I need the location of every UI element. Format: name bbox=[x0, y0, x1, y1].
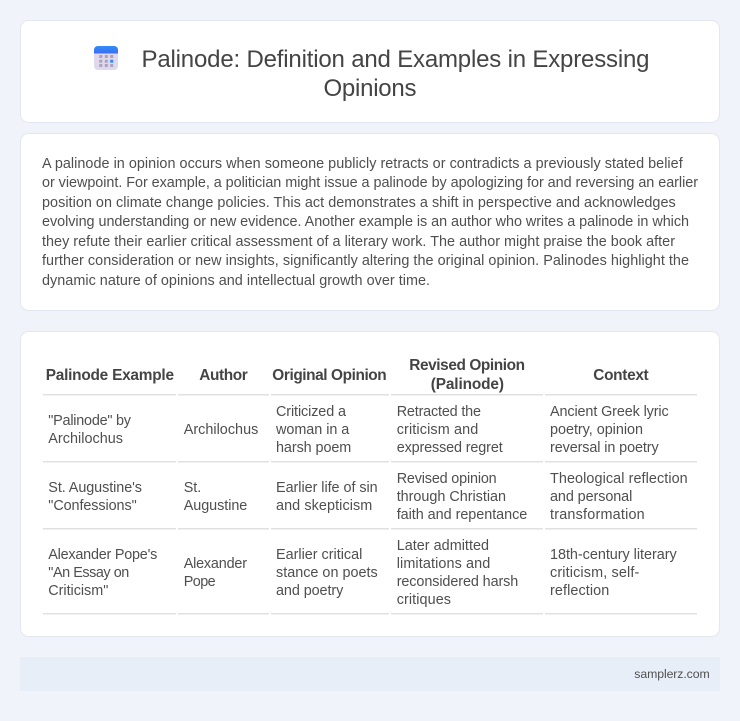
footer: samplerz.com bbox=[634, 667, 710, 681]
footer bbox=[20, 657, 720, 691]
title: Palinode: Definition and Examples in Expressing bbox=[142, 46, 650, 73]
table row: St. Augustine bbox=[43, 471, 697, 530]
panel: title card bbox=[20, 20, 720, 122]
table row: St. Augustine: and personal bbox=[550, 489, 632, 505]
table row: Alexander Pope: and poetry bbox=[276, 583, 344, 599]
table row: St. Augustine: and skepticism bbox=[276, 498, 372, 514]
table row: Alexander Pope: limitations and bbox=[397, 556, 490, 572]
table header: Original Opinion bbox=[272, 367, 387, 384]
table header: Context bbox=[593, 367, 649, 384]
table row: Alexander Pope: reflection bbox=[550, 583, 609, 599]
table row: Alexander Pope: Criticism" bbox=[48, 583, 108, 599]
table row: Alexander Pope: stance on poets bbox=[276, 565, 378, 581]
table header: (Palinode) bbox=[431, 376, 504, 393]
table header bbox=[43, 357, 697, 396]
table row: Alexander Pope: 18th-century literary bbox=[550, 547, 677, 563]
table row: Alexander Pope: reconsidered harsh bbox=[397, 574, 518, 590]
table header: Author bbox=[199, 367, 248, 384]
table row: Alexander Pope bbox=[43, 538, 697, 614]
table row: Alexander Pope: Alexander Pope's bbox=[48, 547, 157, 563]
panel: examples table bbox=[20, 332, 720, 636]
table row: St. Augustine: transformation bbox=[550, 507, 645, 523]
table header: Palinode Example bbox=[46, 367, 174, 384]
table row: Archilochus: Retracted the bbox=[397, 404, 481, 420]
table row: Archilochus: reversal in poetry bbox=[550, 440, 659, 456]
text block: definition paragraph: A palinode in opinion occurs when someone publicly retracts or contradicts a previously stated belief bbox=[42, 156, 684, 172]
text block: definition paragraph: evolving understanding or new evidence. Another example is an author who writes a palinode in which bbox=[42, 214, 689, 230]
table row: St. Augustine: "Confessions" bbox=[48, 498, 137, 514]
table row: Alexander Pope: criticism, self- bbox=[550, 565, 640, 581]
table row: Archilochus: Archilochus bbox=[184, 422, 258, 438]
table row: Alexander Pope: Later admitted bbox=[397, 538, 489, 554]
table row: Archilochus: poetry, opinion bbox=[550, 422, 643, 438]
table row: Archilochus: criticism and bbox=[397, 422, 478, 438]
icon: calendar bbox=[94, 46, 118, 70]
table row: Archilochus: Criticized a bbox=[276, 404, 346, 420]
table row: Alexander Pope: critiques bbox=[397, 592, 451, 608]
table row: Archilochus bbox=[43, 404, 697, 462]
table row: Alexander Pope: "An Essay on bbox=[48, 565, 129, 581]
table row: Archilochus: woman in a bbox=[275, 422, 349, 438]
table row: Alexander Pope: Alexander bbox=[184, 556, 247, 572]
table row: St. Augustine: Augustine bbox=[184, 498, 247, 514]
text block: definition paragraph: they refute their earlier critical assessment of a literary work. The author might praise the book after bbox=[42, 234, 675, 250]
table row: Archilochus: expressed regret bbox=[397, 440, 503, 456]
table row: St. Augustine: Revised opinion bbox=[397, 471, 497, 487]
table row: Archilochus: Ancient Greek lyric bbox=[550, 404, 669, 420]
table row: Archilochus: Archilochus bbox=[48, 431, 123, 447]
text block: definition paragraph: position on climate change policies. This act demonstrates a shift in perspective and acknowledges bbox=[42, 195, 676, 211]
table row: St. Augustine: St. Augustine's bbox=[48, 480, 142, 496]
table row: St. Augustine: through Christian bbox=[397, 489, 506, 505]
table row: Alexander Pope: Earlier critical bbox=[276, 547, 362, 563]
table row: St. Augustine: Earlier life of sin bbox=[276, 480, 378, 496]
table row: St. Augustine: faith and repentance bbox=[397, 507, 527, 523]
panel: definition text bbox=[20, 134, 720, 310]
table row: St. Augustine: Theological reflection bbox=[550, 471, 688, 487]
title bbox=[142, 46, 650, 102]
table row: Archilochus: harsh poem bbox=[276, 440, 351, 456]
text block: definition paragraph: or viewpoint. For example, a politician might issue a palinode by apologizing for and reversing an earlier bbox=[42, 175, 698, 191]
table header: Revised Opinion bbox=[409, 357, 525, 374]
title: Opinions bbox=[324, 75, 416, 102]
text block: definition paragraph: further consideration or new insights, significantly altering the original opinion. Palinodes highlight the bbox=[42, 253, 689, 269]
text block: definition paragraph bbox=[42, 156, 698, 289]
table row: Alexander Pope: Pope bbox=[184, 574, 216, 590]
table row: St. Augustine: St. bbox=[184, 480, 201, 496]
table row: Archilochus: "Palinode" by bbox=[48, 413, 132, 429]
text block: definition paragraph: dynamic nature of opinions and intellectual growth over time. bbox=[42, 273, 430, 289]
